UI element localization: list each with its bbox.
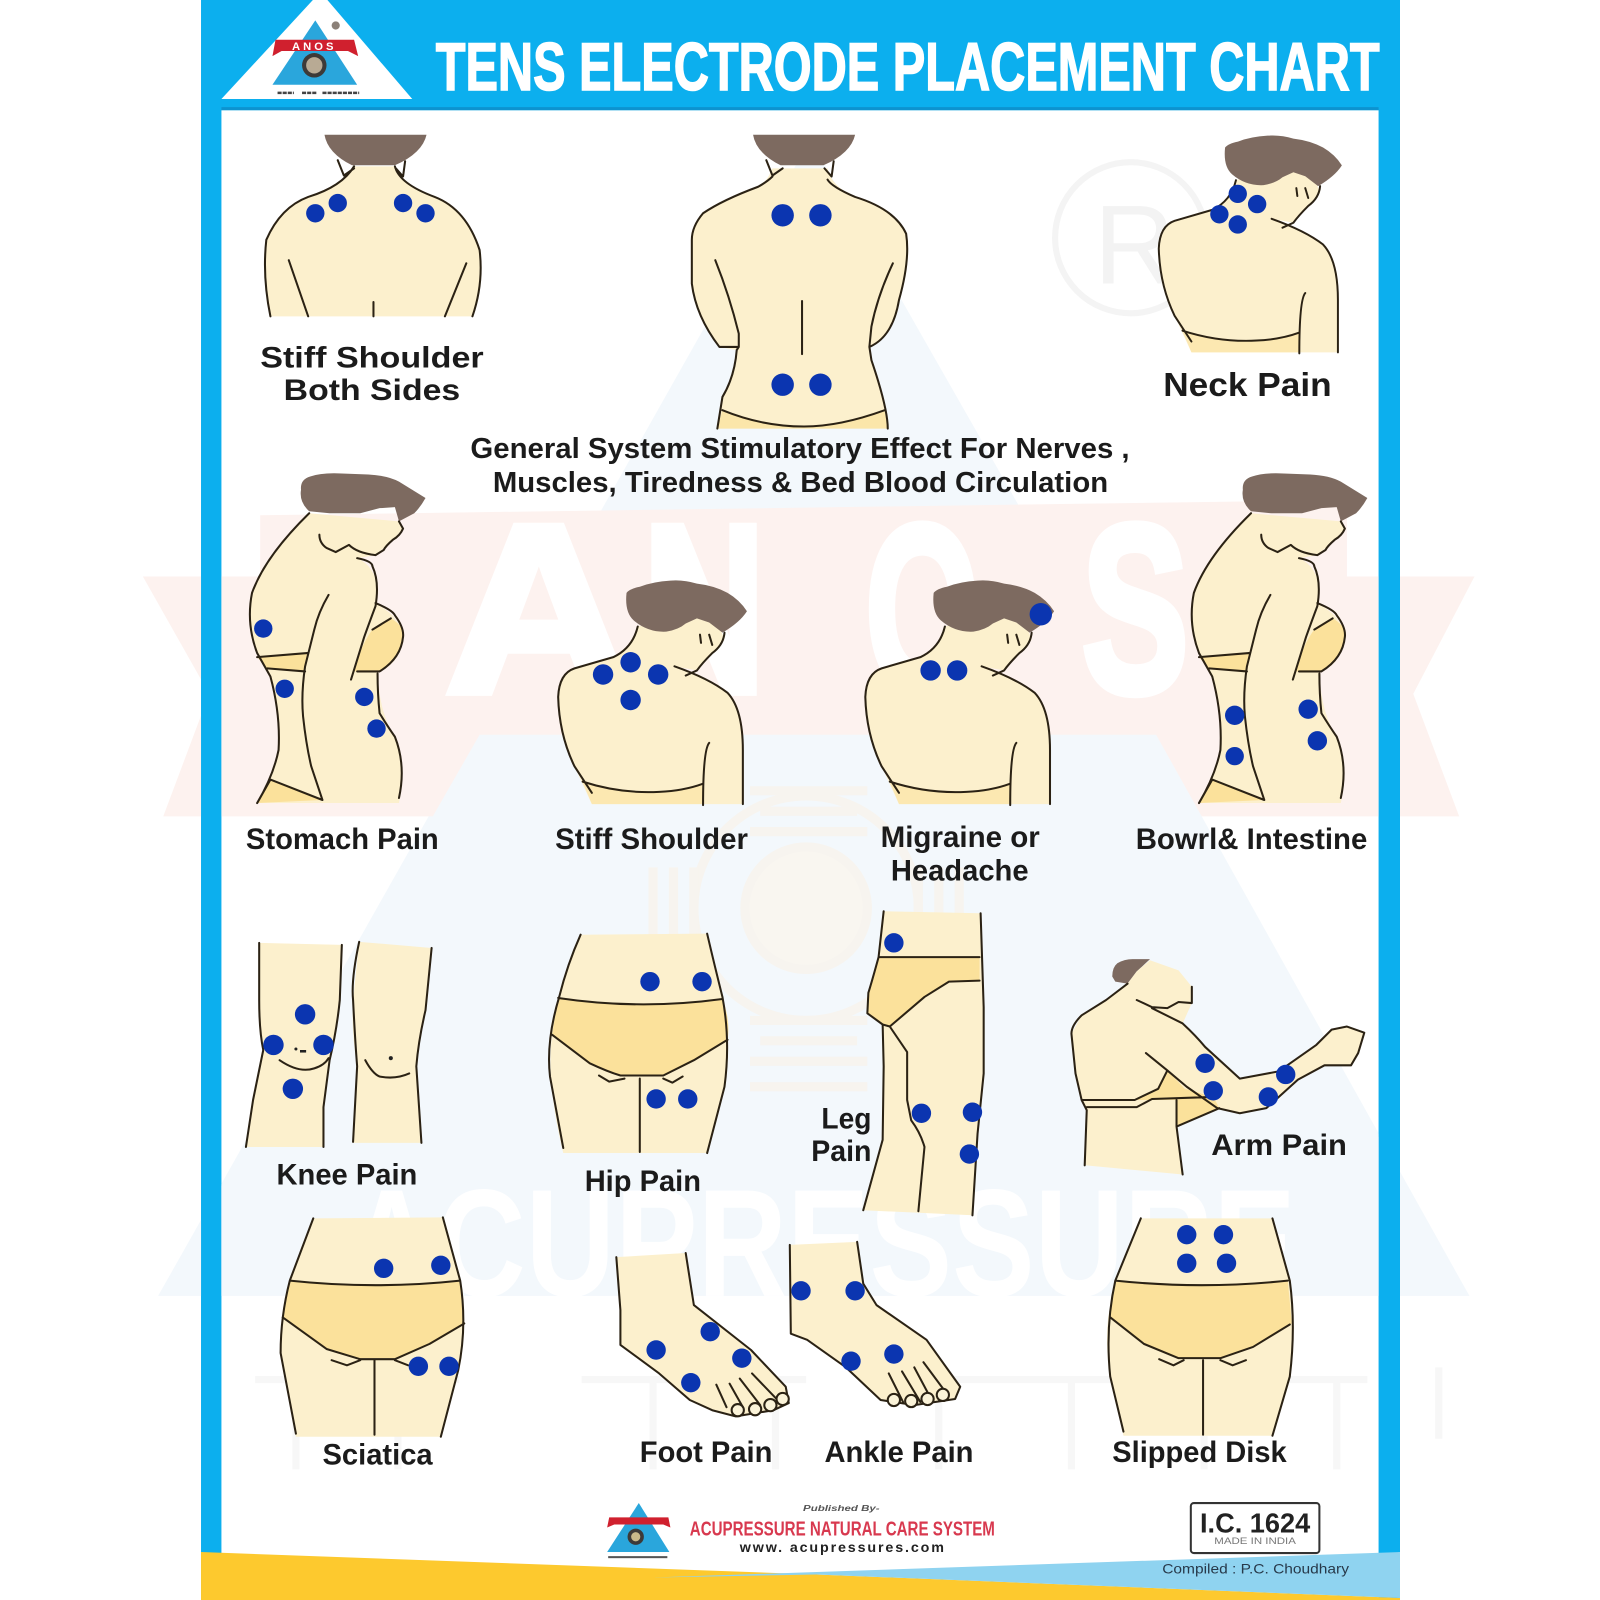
- electrode dots: [1195, 1054, 1295, 1107]
- label: Hip Pain: [585, 1165, 701, 1198]
- description line 2: Muscles, Tiredness & Bed Blood Circulation: [493, 467, 1108, 499]
- figure: upper back: [265, 135, 481, 316]
- white content panel: [221, 110, 1379, 1600]
- label: Migraine or: [881, 821, 1040, 854]
- panel: stiff shoulder: [555, 580, 748, 856]
- watermark: triangle, banner and emblem: R: [1094, 182, 1175, 308]
- panel: neck pain: [1159, 135, 1342, 404]
- electrode dots: [920, 603, 1052, 681]
- website: www. acupressures.com: [739, 1540, 944, 1556]
- panel: ankle pain: [790, 1242, 973, 1469]
- description: General System Stimulatory Effect For Nerves ,: [470, 433, 1130, 465]
- compiler credit: Compiled : P.C. Choudhary: [1162, 1561, 1350, 1577]
- figure: back three quarter: [1159, 135, 1342, 353]
- label line 2: Both Sides: [284, 374, 460, 407]
- panel: stiff shoulder both sides: [260, 135, 484, 407]
- label: Stiff Shoulder: [555, 823, 748, 856]
- panel: sciatica: [281, 1217, 464, 1471]
- watermark: triangle, banner and emblem: O: [865, 475, 980, 743]
- panel: foot pain: [616, 1253, 789, 1469]
- figure: hips: [549, 934, 728, 1153]
- watermark: triangle, banner and emblem: N: [643, 475, 765, 743]
- label: Neck Pain: [1163, 367, 1332, 404]
- panel: leg pain: [811, 911, 984, 1215]
- label: Bowrl& Intestine: [1136, 823, 1367, 856]
- electrode dots: [306, 194, 435, 222]
- figure: foot: [616, 1253, 789, 1416]
- electrode dots: [791, 1281, 904, 1371]
- label: Sciatica: [322, 1438, 433, 1471]
- electrode dots: [1225, 699, 1327, 765]
- figure: knees: [246, 942, 432, 1147]
- panel: knee pain: [246, 942, 432, 1192]
- electrode dots: [263, 1004, 334, 1099]
- panel: stomach pain: [246, 473, 439, 856]
- decorative shadow: [221, 107, 1379, 110]
- panel: slipped disk: [1107, 1218, 1293, 1469]
- label: Leg: [821, 1103, 871, 1136]
- footer logo: [607, 1503, 670, 1558]
- electrode dots: [1177, 1225, 1236, 1273]
- figure: side torso: [1192, 473, 1367, 803]
- electrode dots: [1210, 185, 1266, 234]
- blue frame: [201, 0, 1400, 1600]
- electrode dots: [254, 619, 386, 738]
- panel: general system stimulation: [470, 135, 1130, 499]
- electrode dots: [884, 933, 982, 1164]
- label line 2: Pain: [811, 1135, 871, 1168]
- electrode dots: [646, 1322, 752, 1392]
- figure: foot: [790, 1242, 960, 1407]
- watermark: triangle, banner and emblem: A: [445, 475, 633, 743]
- label: Stiff Shoulder: [260, 341, 484, 374]
- figure: hips: [1107, 1218, 1293, 1436]
- panel: bowel and intestine: [1136, 473, 1367, 856]
- label: Ankle Pain: [824, 1436, 973, 1469]
- label: Stomach Pain: [246, 823, 439, 856]
- bottom yellow and blue band: [201, 1552, 1400, 1600]
- label: Foot Pain: [640, 1436, 772, 1469]
- header logo: [221, 0, 412, 99]
- figure: full back: [692, 135, 907, 429]
- watermark: triangle, banner and emblem: [143, 160, 1474, 1296]
- electrode dots: [771, 204, 832, 396]
- header logo: ANOS: [292, 41, 337, 53]
- label: Arm Pain: [1211, 1129, 1347, 1162]
- watermark: triangle, banner and emblem: S: [1082, 475, 1189, 743]
- label: Slipped Disk: [1112, 1436, 1287, 1469]
- electrode dots: [593, 652, 668, 710]
- panel: arm pain: [1071, 959, 1364, 1174]
- made in india: MADE IN INDIA: [1214, 1536, 1297, 1546]
- figure: back three quarter: [865, 580, 1054, 805]
- panel: migraine or headache: [865, 580, 1054, 888]
- panel: hip pain: [549, 934, 728, 1198]
- figure: side torso: [250, 473, 426, 803]
- figure: back three quarter: [558, 580, 747, 805]
- publisher name: ACUPRESSURE NATURAL CARE SYSTEM: [690, 1519, 995, 1541]
- label line 2: Headache: [891, 855, 1029, 888]
- publisher block: [690, 1503, 995, 1556]
- electrode dots: [640, 972, 712, 1109]
- published by: Published By-: [803, 1503, 880, 1513]
- figure: leg side: [863, 911, 984, 1215]
- figure: hips: [281, 1217, 464, 1437]
- figure: torso with raised arm: [1071, 959, 1364, 1174]
- watermark: triangle, banner and emblem: ACUPRESSURE: [347, 1158, 1296, 1329]
- label: Knee Pain: [277, 1159, 417, 1192]
- catalogue number box: [1191, 1503, 1319, 1553]
- electrode dots: [374, 1256, 459, 1376]
- catalogue number: I.C. 1624: [1200, 1508, 1311, 1539]
